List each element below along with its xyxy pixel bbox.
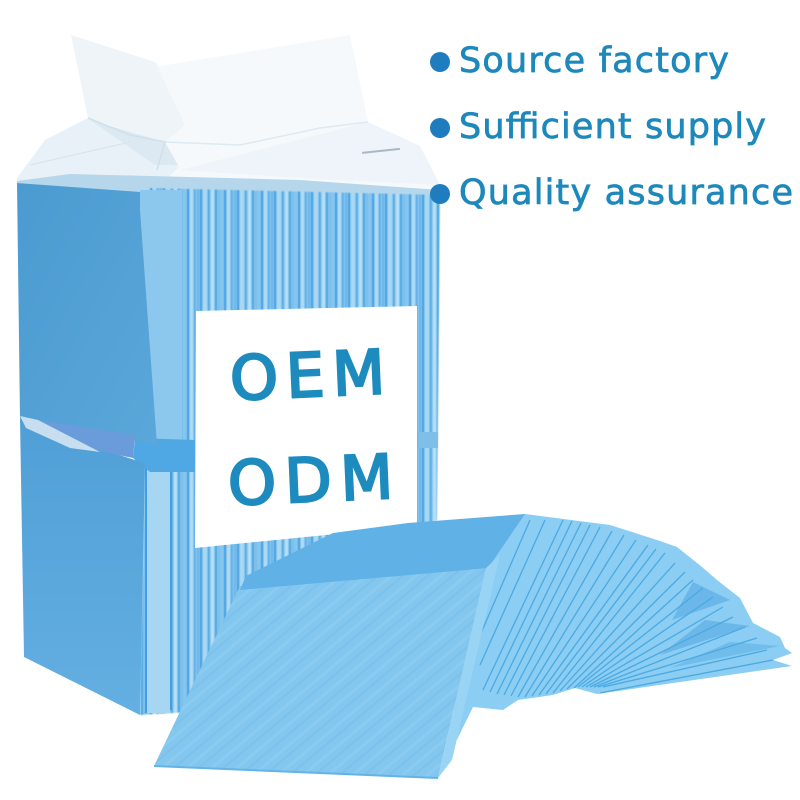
front pad bottom hem <box>154 766 438 778</box>
fan of pad sheets <box>442 514 792 770</box>
front pad face <box>154 568 486 778</box>
label text: ODM: ODM <box>227 442 394 520</box>
stacked pad edges <box>133 188 440 715</box>
plastic wrap top <box>17 35 440 200</box>
bullet: quality assurance <box>430 184 450 204</box>
bullet: sufficient supply <box>430 118 450 138</box>
plastic crease at band <box>20 416 100 452</box>
product: fanned loose pads <box>154 514 792 778</box>
label text: OEM: OEM <box>229 337 387 415</box>
text: sufficient supply: Sufficient supply <box>459 107 766 147</box>
text: quality assurance: Quality assurance <box>459 173 793 213</box>
bullet: source factory <box>430 52 450 72</box>
text: source factory: Source factory <box>459 41 729 81</box>
product: packaged pad bag <box>17 35 440 715</box>
side face lower <box>20 418 145 715</box>
side face upper <box>17 183 157 445</box>
front pad edge <box>438 555 500 778</box>
feature list <box>430 41 793 213</box>
white label <box>195 306 417 548</box>
bag tape band <box>38 420 135 458</box>
front pad folded top <box>240 514 525 590</box>
